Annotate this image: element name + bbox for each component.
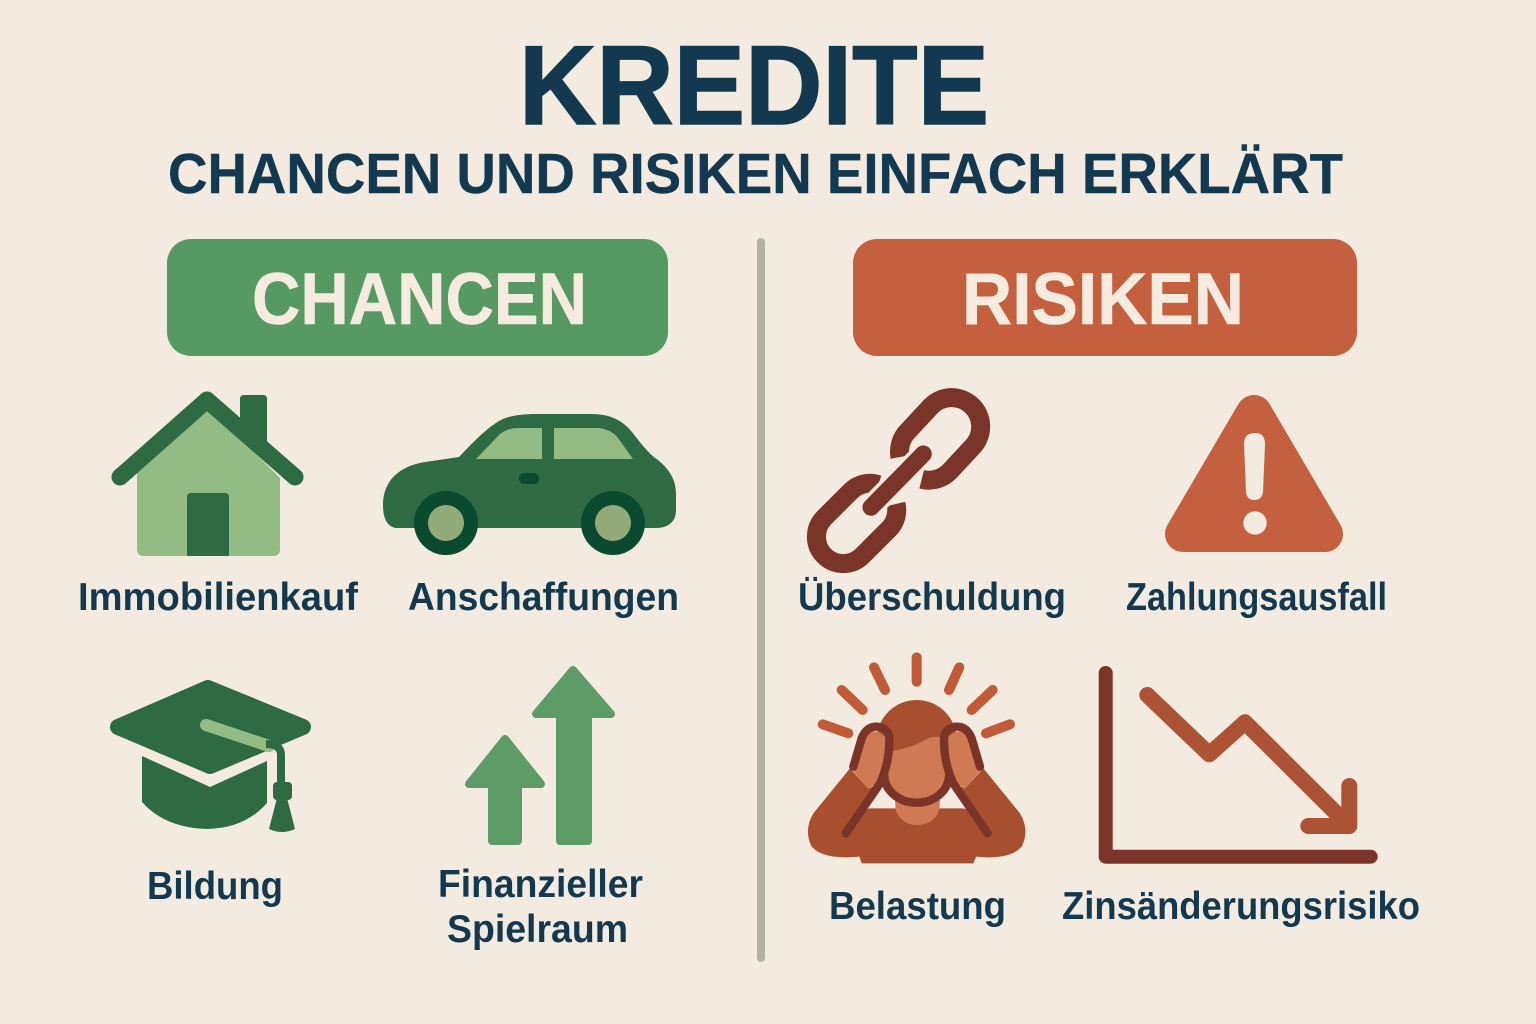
icon: falling chart xyxy=(1106,673,1371,857)
panel: chancen header xyxy=(167,239,668,356)
icon: car xyxy=(383,414,676,555)
label: Bildung: Bildung xyxy=(147,865,283,908)
panel: risiken header: RISIKEN xyxy=(962,259,1244,340)
label: Immobilienkauf: Immobilienkauf xyxy=(78,576,359,619)
icon: chain xyxy=(816,398,981,564)
label: Belastung: Belastung xyxy=(829,885,1006,928)
title: KREDITE xyxy=(519,23,989,148)
label: Überschuldung: Überschuldung xyxy=(798,576,1066,619)
icon: graduation cap xyxy=(118,688,303,832)
panel: risiken header xyxy=(853,239,1357,356)
icon: warning triangle xyxy=(1183,413,1325,535)
label: Zahlungsausfall: Zahlungsausfall xyxy=(1126,576,1387,619)
label: Zinsänderungsrisiko: Zinsänderungsrisiko xyxy=(1062,885,1420,928)
icon: stressed person xyxy=(808,657,1025,863)
panel: chancen header: CHANCEN xyxy=(252,259,587,340)
label: Finanzieller Spielraum xyxy=(438,863,643,951)
icon: rising arrows xyxy=(469,670,611,841)
subtitle: CHANCEN UND RISIKEN EINFACH ERKLÄRT xyxy=(168,142,1343,206)
label: Anschaffungen: Anschaffungen xyxy=(408,576,679,619)
icon: house xyxy=(120,395,295,556)
label: Finanzieller Spielraum: Finanzieller xyxy=(438,863,643,906)
label: Finanzieller Spielraum: Spielraum xyxy=(447,908,628,951)
